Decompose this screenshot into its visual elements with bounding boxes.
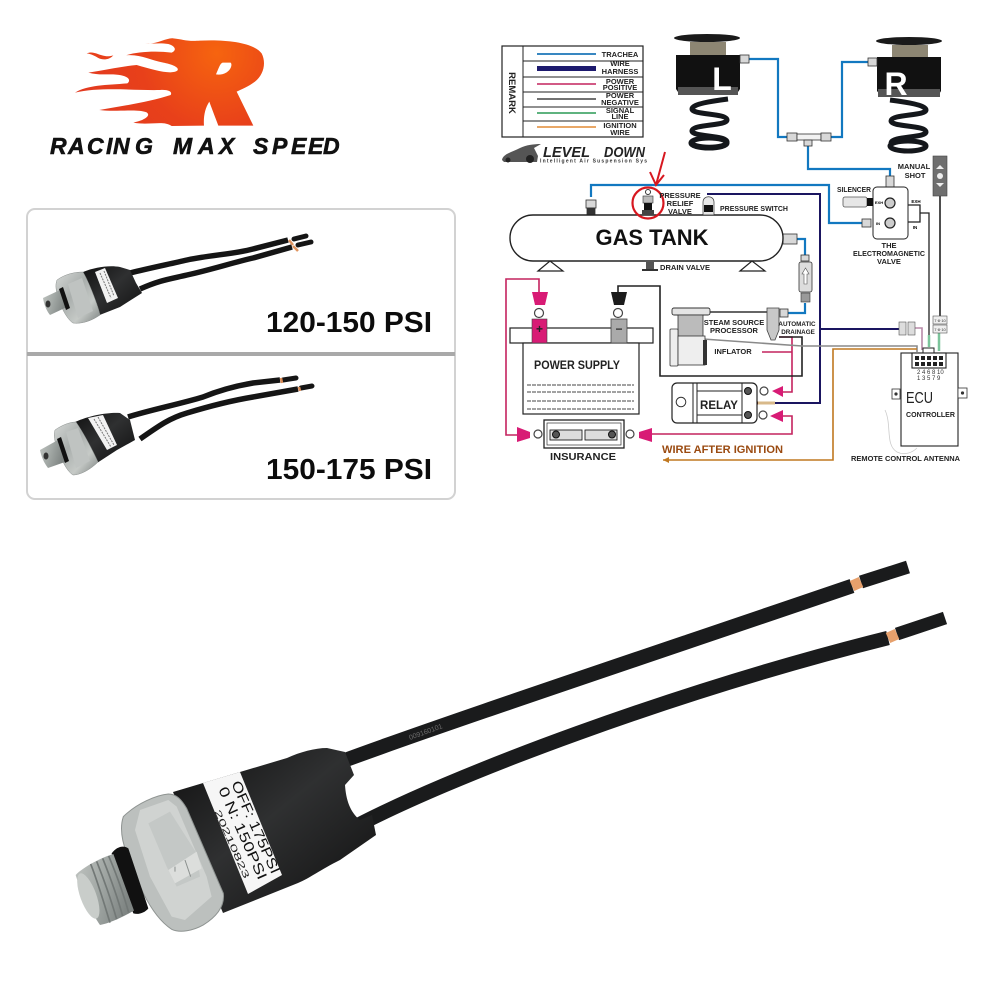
- solenoid valve: ELECTROMAGNETIC: [853, 249, 926, 258]
- ECU controller: 7·8·10: [934, 327, 947, 332]
- solenoid valve: VALVE: [877, 257, 901, 266]
- solenoid valve: EXH: [911, 199, 921, 204]
- switch photo: 150-175 PSI: [40, 378, 312, 475]
- solenoid valve: IN: [913, 225, 917, 230]
- switch photo: 120-150 PSI: [43, 236, 311, 323]
- spec label: 0 N: 150PSI: [215, 784, 271, 882]
- legend: remark table: NEGATIVE: [601, 98, 639, 107]
- o-ring: [112, 847, 148, 914]
- price range label: 150-175 PSI: 150-175 PSI: [266, 454, 432, 486]
- pressure relief valve: [632, 188, 701, 218]
- arrow: ignition wire: [663, 457, 669, 463]
- manual shot switch: MANUAL: [898, 162, 931, 171]
- drain valve: [642, 262, 710, 272]
- brand: Level Down: Intelligent Air Suspension Sys: [540, 158, 647, 164]
- threaded port: [73, 854, 134, 925]
- fuse: insurance: INSURANCE: [550, 451, 616, 463]
- legend: remark table: POSITIVE: [603, 83, 637, 92]
- pressure switch: [703, 194, 899, 403]
- gas tank: GAS TANK: [596, 225, 709, 250]
- inflator compressor: PROCESSOR: [710, 326, 759, 335]
- legend: remark table: REMARK: [506, 72, 517, 114]
- ECU controller: ECU: [906, 390, 933, 407]
- battery: +: [536, 322, 543, 336]
- pressure relief valve: RELIEF: [667, 199, 694, 208]
- inflator compressor: STEAM SOURCE: [704, 318, 764, 327]
- spec label: OFF: 175PSI: [228, 778, 284, 876]
- relay: [672, 383, 783, 423]
- pressure relief valve: PRESSURE: [659, 191, 701, 200]
- inflator compressor: INFLATOR: [714, 347, 752, 356]
- battery: POWER SUPPLY: [534, 360, 620, 372]
- air fittings: [586, 55, 894, 317]
- automatic drainage separator: [767, 308, 816, 340]
- brand: Level Down: LEVEL: [543, 144, 590, 161]
- icon: flaming R: [75, 38, 264, 126]
- legend: remark table: LINE: [611, 112, 629, 121]
- legend: remark table: TRACHEA: [602, 50, 639, 59]
- air spring: left: L: [712, 61, 732, 97]
- over-moulded body: [173, 748, 376, 913]
- price range label: 120-150 PSI: 120-150 PSI: [266, 307, 432, 339]
- battery: −: [615, 322, 623, 336]
- manual shot switch: [898, 156, 947, 316]
- spec label: [203, 772, 284, 894]
- ECU controller: CONTROLLER: [906, 410, 956, 419]
- brand: Level Down: [502, 144, 647, 164]
- fuse: insurance: [517, 420, 652, 463]
- inflator compressor: [670, 308, 767, 366]
- ECU controller: 1 3 5 7 9: [917, 376, 941, 382]
- air spring: right: R: [884, 66, 908, 102]
- ECU controller: [851, 316, 967, 463]
- spec label: 20210823: [212, 808, 252, 880]
- pressure relief valve: VALVE: [668, 207, 692, 216]
- icon: car: [502, 144, 541, 163]
- drain valve: DRAIN VALVE: [660, 263, 710, 272]
- solenoid valve: IN: [876, 221, 880, 226]
- brand: Level Down: DOWN: [604, 144, 646, 161]
- label: wire after ignition: WIRE AFTER IGNITION: [662, 444, 783, 456]
- panel: PSI variants: [27, 209, 455, 499]
- wiring diagram: [502, 34, 967, 463]
- cable: upper wire: [340, 567, 908, 762]
- serial print on wire: 009160101: [408, 723, 444, 742]
- main product photo: pressure switch: [73, 567, 945, 931]
- battery: [510, 292, 653, 414]
- logo wordmark: SPEED: [253, 133, 340, 159]
- legend: remark table: WIRE: [610, 128, 630, 137]
- pressure switch: PRESSURE SWITCH: [720, 204, 788, 213]
- logo wordmark: RACING: [50, 133, 153, 159]
- air lines (blue): [591, 59, 890, 313]
- cable: lower wire: [345, 618, 945, 832]
- silencer: SILENCER: [837, 185, 872, 194]
- metal hex base: [122, 794, 224, 931]
- automatic drainage separator: AUTOMATIC: [778, 321, 816, 328]
- gas tank: [510, 215, 783, 271]
- legend: remark table: SIGNAL: [606, 106, 635, 115]
- solenoid valve: [853, 187, 929, 335]
- solenoid valve: THE: [882, 241, 896, 250]
- ECU controller: 2 4 6 8 10: [917, 370, 944, 376]
- legend: remark table: [502, 46, 643, 137]
- legend: remark table: POWER: [606, 77, 635, 86]
- filter: [799, 262, 812, 302]
- legend: remark table: POWER: [606, 91, 635, 100]
- ECU controller: 7·8·10: [934, 318, 947, 323]
- legend: remark table: WIRE: [610, 59, 630, 68]
- ECU controller: REMOTE CONTROL ANTENNA: [851, 456, 960, 463]
- silencer: [837, 185, 873, 207]
- air spring: left: [674, 34, 740, 148]
- relay: RELAY: [700, 400, 738, 412]
- legend: remark table: HARNESS: [602, 67, 638, 76]
- manual shot switch: SHOT: [905, 171, 926, 180]
- solenoid valve: EXH: [875, 200, 883, 205]
- logo: Racing Max Speed: [50, 38, 340, 159]
- logo wordmark: [50, 133, 340, 159]
- legend: remark table: IGNITION: [603, 121, 637, 130]
- arrow: points to relief valve: [650, 152, 665, 185]
- automatic drainage separator: DRAINAGE: [781, 329, 815, 336]
- wiring: power and ground: [506, 279, 922, 460]
- air spring: right: [876, 37, 942, 151]
- logo wordmark: MAX: [173, 133, 236, 159]
